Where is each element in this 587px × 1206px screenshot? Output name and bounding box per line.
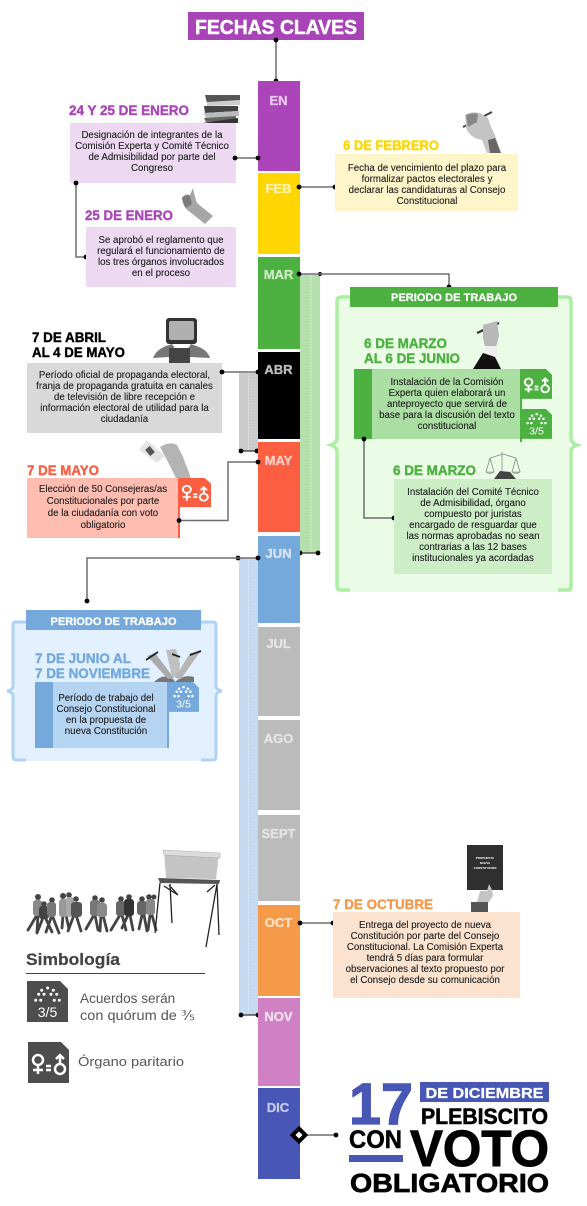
legend: quorum [27, 981, 195, 1023]
event: 7 de mayo [27, 462, 180, 538]
connector: enero box to timeline [233, 156, 260, 160]
event: 7 de octubre [333, 896, 520, 998]
month: diciembre: DIC [267, 1100, 290, 1115]
event: 24 y 25 de enero: de Admisibilidad por parte del [88, 152, 216, 163]
event: 6 de marzo al 6 de junio: base para la discusión del texto [379, 410, 515, 421]
icon: organo paritario [28, 1042, 69, 1083]
month: mayo: MAY [265, 453, 293, 468]
event: 6 de marzo al 6 de junio: constitucional [418, 421, 476, 432]
icon: hand holding constitution: NUEVA [480, 861, 491, 865]
connector: between enero events [74, 181, 88, 259]
event: 6 de marzo al 6 de junio [354, 335, 522, 442]
event: 6 de marzo: institucionales ya acordadas [412, 553, 534, 564]
connector: abril [220, 370, 260, 374]
bar: gray propaganda period [239, 373, 259, 453]
callout: 17 de diciembre plebiscito con voto obligatorio: DE DICIEMBRE [426, 1085, 544, 1102]
event: 6 de marzo al 6 de junio: Experta quien elaborará un [389, 388, 505, 399]
event: 6 de marzo al 6 de junio: 6 DE MARZO [364, 335, 447, 351]
icon: hand holding constitution: CONSTITUCIÓN [474, 865, 496, 870]
event: 24 y 25 de enero: Designación de integrantes de la [81, 130, 223, 141]
illustration: people queuing to vote [28, 892, 156, 933]
event: 7 de abril al 4 de mayo: Período oficial de propaganda electoral, [39, 370, 210, 381]
icon: hands writing in book [146, 649, 201, 682]
icon: quorum: 3/5 [38, 1004, 57, 1020]
icon: stack of books [202, 95, 240, 123]
legend: quorum: con quórum de ⅗ [80, 1008, 195, 1023]
event: 7 de mayo: obligatorio [81, 520, 125, 531]
month: marzo: MAR [264, 267, 294, 282]
event: 6 de marzo: las normas aprobadas no sean [406, 531, 540, 542]
heading: periodo de trabajo [350, 287, 558, 307]
icon: organo paritario green [521, 369, 552, 399]
event: 7 de junio al 7 de noviembre [35, 650, 169, 748]
bar: blue working period [236, 556, 260, 1017]
connector: diciembre [293, 1129, 338, 1141]
month: junio: JUN [265, 546, 292, 561]
event: 7 de abril al 4 de mayo: de televisión de libre recepción e [54, 392, 195, 403]
icon: organo paritario orange [178, 478, 211, 507]
icon: hand with pen [463, 112, 501, 153]
event: 6 de febrero: Constitucional [397, 196, 457, 207]
connector: title to timeline [274, 38, 278, 83]
event: 7 de junio al 7 de noviembre: 7 DE NOVIEMBRE [35, 665, 150, 681]
event: 25 de enero: Se aprobó el reglamento que [99, 235, 223, 246]
event: 7 de octubre: Constitución por parte del Consejo [351, 931, 499, 942]
event: 7 de mayo: 7 DE MAYO [27, 462, 99, 478]
month: enero: EN [269, 93, 288, 108]
connector: marzo to working period [297, 272, 451, 289]
heading: periodo de trabajo: PERIODO DE TRABAJO [391, 292, 517, 304]
event: 25 de enero: regulará el funcionamiento de [97, 246, 225, 257]
connector: febrero [297, 185, 337, 189]
panel: periodo de trabajo marzo [331, 287, 577, 592]
event: 7 de mayo: Elección de 50 Consejeras/as [39, 484, 167, 495]
month: febrero: FEB [266, 181, 292, 196]
legend: organo paritario [28, 1042, 184, 1083]
heading: periodo de trabajo [26, 610, 201, 630]
event: 7 de octubre: tendrá 5 días para formular [367, 953, 484, 964]
legend: quorum: Acuerdos serán [80, 991, 175, 1006]
icon: quorum blue: 3/5 [176, 700, 191, 710]
event: 7 de junio al 7 de noviembre: Consejo Constitucional [56, 704, 156, 715]
panel: periodo de trabajo junio [7, 610, 222, 761]
icon: hand holding constitution [467, 845, 503, 912]
event: 7 de junio al 7 de noviembre: 7 DE JUNIO AL [35, 650, 131, 666]
event: 24 y 25 de enero [69, 102, 236, 183]
month: febrero [258, 173, 300, 254]
month: julio: JUL [266, 636, 291, 651]
event: 7 de abril al 4 de mayo: ciudadanía [101, 414, 149, 425]
icon: hand signing [473, 321, 501, 369]
icon: hand with ballot [139, 440, 191, 478]
event: 7 de octubre: el Consejo desde su comunicación [350, 975, 500, 986]
month: julio [258, 627, 300, 716]
month: noviembre [258, 998, 300, 1086]
event: 7 de abril al 4 de mayo [27, 329, 222, 433]
event: 7 de abril al 4 de mayo: franja de propaganda gratuita en canales [36, 381, 213, 392]
heading: simbologia: Simbología [26, 950, 121, 969]
event: 25 de enero: 25 DE ENERO [85, 207, 173, 223]
icon: quorum blue [168, 682, 199, 712]
event: 7 de abril al 4 de mayo: 7 DE ABRIL [32, 329, 106, 345]
legend: organo paritario: Órgano paritario [78, 1054, 184, 1069]
icon: quorum green [521, 409, 552, 439]
bar: green working period [298, 272, 322, 555]
timeline months [258, 81, 300, 1179]
month: marzo [258, 257, 300, 349]
month: abril [258, 352, 300, 439]
event: 6 de marzo: 6 DE MARZO [393, 462, 476, 478]
event: 7 de abril al 4 de mayo: información electoral de utilidad para la [40, 403, 209, 414]
event: 7 de junio al 7 de noviembre: en la propuesta de [66, 715, 146, 726]
event: 6 de marzo [393, 462, 552, 574]
event: 24 y 25 de enero: Comisión Experta y Comité Técnico [75, 141, 229, 152]
event: 6 de febrero [335, 137, 518, 211]
event: 25 de enero: los tres órganos involucrados [98, 257, 224, 268]
event: 6 de marzo: contrarias a las 12 bases [419, 542, 527, 553]
title: FECHAS CLAVES [195, 17, 357, 39]
month: agosto [258, 720, 300, 810]
connector: mayo [177, 460, 260, 523]
event: 24 y 25 de enero: Congreso [131, 163, 173, 174]
illustration: ballot box on table [155, 850, 220, 947]
callout: 17 de diciembre plebiscito con voto obligatorio [349, 1072, 549, 1198]
callout: 17 de diciembre plebiscito con voto obligatorio: 17 [349, 1072, 413, 1137]
event: 7 de junio al 7 de noviembre: Período de trabajo del [58, 693, 154, 704]
month: diciembre [258, 1088, 300, 1179]
event: 7 de octubre: Entrega del proyecto de nueva [359, 920, 492, 931]
icon: quorum [27, 981, 68, 1022]
month: agosto: AGO [264, 731, 293, 746]
month: junio [258, 536, 300, 623]
month: abril: ABR [264, 362, 293, 377]
event: 7 de octubre: 7 DE OCTUBRE [333, 896, 433, 912]
event: 6 de marzo al 6 de junio: Instalación de la Comisión [390, 377, 504, 388]
event: 6 de marzo: compuesto por juristas [424, 509, 522, 520]
event: 6 de marzo: encargado de resguardar que [409, 520, 537, 531]
event: 6 de febrero: declarar las candidaturas al Consejo [349, 185, 505, 196]
icon: quorum green: 3/5 [529, 427, 544, 437]
icon: person with tv head [153, 318, 210, 363]
callout: 17 de diciembre plebiscito con voto obligatorio: PLEBISCITO [421, 1104, 548, 1129]
icon: thumb up [182, 188, 213, 224]
event: 7 de octubre: Constitucional. La Comisión Experta [347, 942, 504, 953]
callout: 17 de diciembre plebiscito con voto obligatorio: OBLIGATORIO [350, 1168, 549, 1198]
event: 6 de marzo: Instalación del Comité Técnico [407, 487, 539, 498]
event: 6 de marzo: de Admisibilidad, órgano [420, 498, 526, 509]
event: 7 de abril al 4 de mayo: AL 4 DE MAYO [32, 344, 125, 360]
connector: octubre [298, 921, 335, 925]
event: 25 de enero [85, 207, 236, 287]
event: 25 de enero: en el proceso [132, 268, 190, 279]
month: enero [258, 81, 300, 171]
month: septiembre: SEPT [262, 826, 296, 841]
month: octubre: OCT [265, 915, 292, 930]
month: noviembre: NOV [264, 1009, 293, 1024]
event: 6 de marzo al 6 de junio: anteproyecto que servirá de [387, 399, 507, 410]
event: 7 de octubre: observaciones al texto propuesto por [346, 964, 505, 975]
event: 6 de febrero: formalizar pactos electorales y [362, 174, 493, 185]
event: 6 de febrero: 6 DE FEBRERO [343, 137, 439, 153]
callout: 17 de diciembre plebiscito con voto obligatorio: VOTO [410, 1120, 549, 1177]
month: mayo [258, 442, 300, 532]
event: 7 de junio al 7 de noviembre: nueva Constitución [65, 726, 147, 737]
event: 7 de mayo: de la ciudadanía con voto [48, 508, 158, 519]
icon: hand holding constitution: PROPUESTA [476, 856, 495, 860]
icon: scales of justice [486, 452, 520, 479]
heading: periodo de trabajo: PERIODO DE TRABAJO [50, 616, 177, 628]
event: 7 de mayo: Constitucionales por parte [47, 496, 159, 507]
month: septiembre [258, 815, 300, 901]
callout: 17 de diciembre plebiscito con voto obligatorio: CON [349, 1126, 402, 1154]
event: 24 y 25 de enero: 24 Y 25 DE ENERO [69, 102, 189, 118]
connector: junio to working period [85, 556, 260, 603]
connector: between marzo events [362, 437, 396, 520]
month: octubre [258, 905, 300, 996]
event: 6 de marzo al 6 de junio: AL 6 DE JUNIO [364, 350, 460, 366]
event: 6 de febrero: Fecha de vencimiento del plazo para [348, 163, 507, 174]
